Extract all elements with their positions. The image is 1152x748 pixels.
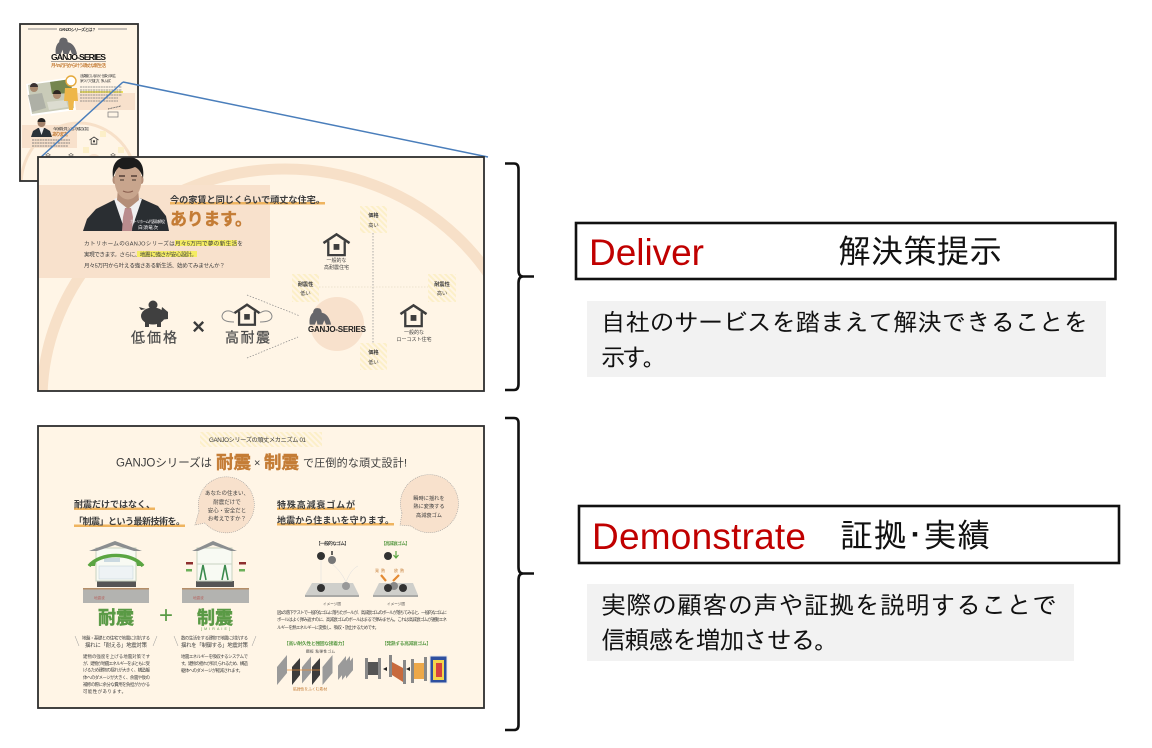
thumbnail header bbox=[28, 26, 127, 33]
thumbnail logo: 月々5万円から叶う頑丈な新生活 bbox=[51, 62, 106, 69]
illustration: earthquake-resistant house: 地震波 bbox=[94, 595, 105, 600]
thumbnail logo bbox=[51, 38, 106, 69]
heading: high-damping rubber bbox=[277, 499, 394, 526]
icon: general high-seismic house: 一般的な bbox=[326, 257, 347, 264]
heading: high-damping rubber: 特殊高減衰ゴムが bbox=[277, 499, 355, 510]
main title: × bbox=[254, 458, 260, 470]
axis label: seismic low: 低い bbox=[300, 289, 311, 297]
speech bubble: question: 耐震だけで bbox=[213, 498, 241, 506]
illustration: vibration-controlled house bbox=[182, 541, 249, 603]
thumbnail illustration: woman bbox=[64, 76, 78, 110]
diagram: durability plates: 粘弾性をふくむ素材 bbox=[293, 686, 327, 692]
thumbnail lower copy: あります。 bbox=[52, 131, 71, 138]
heading: vibration control: 「制震」という最新技術を。 bbox=[74, 516, 185, 526]
speech bubble: question: あなたの住まい、 bbox=[205, 489, 249, 497]
body copy: 実現できます。さらに、地震に強さが安心設計。 bbox=[84, 250, 197, 258]
illustration: earthquake-resistant house bbox=[83, 541, 149, 603]
heading box: Deliver: Deliver bbox=[589, 232, 704, 273]
axis label: price low: 価格 bbox=[368, 348, 379, 356]
icon: general low-cost house bbox=[396, 305, 432, 343]
panel: GANJO series mechanism bbox=[38, 426, 484, 708]
icon: general low-cost house: ローコスト住宅 bbox=[396, 336, 432, 343]
diagram: durability plates bbox=[277, 640, 353, 692]
axis label: price high: 高い bbox=[368, 221, 379, 229]
logo: GANJO-SERIES circle: GANJO-SERIES bbox=[308, 325, 367, 334]
heading box: Deliver bbox=[576, 223, 1116, 279]
plus sign: + bbox=[159, 602, 173, 629]
icon: general low-cost house: 一般的な bbox=[404, 329, 424, 336]
illustration: vibration-controlled house: 地震波 bbox=[193, 595, 204, 600]
heading box: Deliver: 解決策提示 bbox=[838, 233, 1002, 270]
axis label: price low bbox=[360, 343, 387, 370]
text block: Deliver description: 自社のサービスを踏まえて解決できることを bbox=[601, 310, 1088, 337]
heading: 今の家賃と同じくらいで頑丈な住宅。 bbox=[170, 194, 325, 205]
axis label: price high bbox=[360, 206, 387, 233]
body copy bbox=[84, 240, 243, 270]
text block: Demonstrate description: 信頼感を増加させる。 bbox=[601, 627, 839, 655]
diagram: ordinary rubber: イメージ図 bbox=[323, 602, 341, 606]
diagram: high-damping rubber: イメージ図 bbox=[387, 602, 405, 606]
axis label: price high: 価格 bbox=[368, 211, 379, 219]
body copy: カトリホームのGANJOシリーズは月々5万円で夢の新生活を bbox=[84, 240, 243, 248]
main title: 耐震 bbox=[216, 452, 252, 472]
text block: resistance: 揺れに「耐える」地震対策 bbox=[85, 641, 148, 649]
speech bubble: rubber bbox=[400, 475, 458, 533]
diagram: ordinary rubber: 【一般的なゴム】 bbox=[316, 540, 349, 547]
dotted connectors to logo bbox=[247, 295, 300, 358]
label: low price: 低価格 bbox=[131, 330, 177, 346]
text block: Deliver description bbox=[587, 301, 1106, 377]
text block: resistance: 体へのダメージが大きく、余震や後の bbox=[83, 674, 150, 681]
diagram: ordinary rubber bbox=[305, 540, 359, 606]
text block: Demonstrate description: 実際の顧客の声や証拠を説明することで bbox=[601, 592, 1057, 620]
speech bubble: question bbox=[195, 477, 254, 533]
heading: あります。 bbox=[170, 210, 252, 229]
main title: GANJOシリーズは bbox=[116, 456, 212, 470]
text block: resistance: 建物の強度を上げる地震対策です bbox=[83, 653, 151, 660]
axis label: price low: 低い bbox=[368, 358, 379, 366]
axis label: seismic high bbox=[428, 274, 456, 302]
main title: 制震 bbox=[264, 452, 300, 472]
label: 制震: 制震 bbox=[197, 608, 233, 628]
speech bubble: question: お考えですか？ bbox=[208, 516, 246, 522]
bracket: demonstrate bbox=[505, 418, 534, 730]
multiply sign: × bbox=[192, 314, 205, 339]
decorative arc and band bbox=[39, 164, 483, 390]
diagram: high-damping rubber bbox=[373, 540, 418, 606]
thumbnail text lines: 家づくりで悩む方、多いはず。 bbox=[80, 78, 113, 83]
section tag: GANJOシリーズの頑丈メカニズム 01 bbox=[209, 436, 307, 444]
text block: resistance: が、建物が地震エネルギーをまともに受 bbox=[83, 660, 151, 667]
text block: control: 数の生活をする建物で地震に対抗する bbox=[181, 634, 248, 642]
thumbnail logo: GANJO-SERIES bbox=[51, 52, 106, 62]
thumbnail text lines bbox=[80, 73, 123, 117]
thumbnail family photo bbox=[26, 77, 76, 116]
text block: Demonstrate description bbox=[587, 584, 1074, 661]
portrait of company president bbox=[83, 157, 169, 231]
text block: resistance: けるため建物の揺れが大きく、構造躯 bbox=[83, 666, 151, 674]
heading box: Demonstrate: 証拠･実績 bbox=[840, 517, 990, 554]
text block: control bbox=[174, 634, 256, 674]
explanatory paragraph: 図1の落下テストで一般的なゴムに落ちたボールが、高減衰ゴムのボールが落ちてみると、一般的なゴムに bbox=[277, 609, 447, 616]
icon: general high-seismic house: 高耐震住宅 bbox=[324, 264, 349, 271]
diagram: heat-generating rubber: 【発熱する高減衰ゴム】 bbox=[382, 640, 431, 647]
axes bbox=[319, 233, 428, 343]
text block: resistance: 地盤・基礎との住宅で地震に対抗する bbox=[82, 634, 150, 642]
label: 耐震: 耐震 bbox=[98, 608, 134, 628]
thumbnail lower copy bbox=[32, 126, 91, 146]
heading: vibration control bbox=[74, 498, 185, 527]
portrait of company president: 白須竜次 bbox=[138, 224, 158, 231]
portrait of company president: カトリホーム代表取締役 bbox=[130, 219, 165, 224]
heading bbox=[170, 194, 325, 229]
text block: control: 揺れを「制御する」地震対策 bbox=[181, 641, 249, 649]
text block: resistance bbox=[75, 634, 157, 695]
heading: high-damping rubber: 地震から住まいを守ります。 bbox=[277, 514, 394, 526]
thumbnail: brochure page bbox=[19, 23, 139, 182]
icon: piggy bank bbox=[139, 300, 168, 327]
text block: resistance: 補修の際に余分な費用を負担がかかる bbox=[83, 681, 150, 688]
main title bbox=[116, 452, 407, 472]
section tag bbox=[200, 432, 322, 447]
thumbnail icons bbox=[45, 131, 124, 168]
text block: control: 躯体へのダメージが軽減されます。 bbox=[181, 667, 243, 674]
main title: で圧倒的な頑丈設計! bbox=[303, 456, 407, 470]
panel: low price and high seismic resistance bbox=[37, 156, 485, 392]
logo: GANJO-SERIES circle bbox=[308, 297, 367, 351]
explanatory paragraph: ボールはよく弾み返すのに、高減衰ゴムのボールはまるで弾みません。これは高減衰ゴムが運動エネ bbox=[277, 616, 448, 623]
explanatory paragraph: ルギーを熱エネルギーに変換し、吸収・放出するためです。 bbox=[277, 624, 379, 631]
heading box: Demonstrate bbox=[579, 506, 1119, 563]
label: 制震: [MIRAIE] bbox=[201, 627, 230, 631]
body copy: 月々5万円から叶える強さある新生活、始めてみませんか？ bbox=[84, 262, 225, 270]
thumbnail text lines: 近頃増えているのが、仕事との両立。 bbox=[80, 73, 118, 78]
speech bubble: rubber: 瞬時に揺れを bbox=[413, 494, 445, 502]
speech bubble: question: 安心・安全だと bbox=[208, 506, 246, 514]
speech bubble: rubber: 熱に変換する bbox=[413, 502, 445, 510]
label: high seismic resistance: 高耐震 bbox=[225, 330, 270, 346]
diagram: heat-generating rubber bbox=[365, 640, 447, 684]
axis label: seismic high: 高い bbox=[437, 289, 447, 297]
zoom connector lines bbox=[40, 82, 488, 158]
diagram: durability plates: 【高い耐久性と強固な接着力】 bbox=[284, 640, 347, 647]
thumbnail band and arc bbox=[21, 93, 135, 180]
diagram: high-damping rubber: 【高減衰ゴム】 bbox=[381, 540, 410, 547]
thumbnail portrait bbox=[31, 118, 52, 137]
bracket: deliver bbox=[505, 164, 534, 390]
icon: strong house bbox=[222, 305, 272, 325]
heading: vibration control: 耐震だけではなく、 bbox=[74, 498, 155, 510]
axis label: seismic low bbox=[292, 274, 319, 302]
text block: Deliver description: 示す。 bbox=[601, 345, 667, 372]
speech bubble: rubber: 高減衰ゴム bbox=[416, 511, 442, 519]
diagram: durability plates: 鋼板 粘弾性ゴム bbox=[306, 648, 335, 654]
text block: control: す。建物の揺れが抑えられるため、構造 bbox=[181, 660, 249, 667]
axis label: seismic high: 耐震性 bbox=[434, 280, 450, 288]
heading box: Demonstrate: Demonstrate bbox=[592, 516, 806, 557]
thumbnail lower copy: 今の家賃と同じくらいで頑丈な住宅。 bbox=[53, 126, 91, 131]
diagram: high-damping rubber: 発熱 bbox=[375, 567, 385, 573]
thumbnail header: GANJOシリーズとは？ bbox=[59, 26, 96, 33]
text block: resistance: 可能性があります。 bbox=[83, 688, 126, 695]
explanatory paragraph bbox=[277, 609, 448, 631]
axis label: seismic low: 耐震性 bbox=[298, 280, 313, 288]
text block: control: 地震エネルギーを吸収するシステムで bbox=[181, 653, 249, 660]
icon: general high-seismic house bbox=[323, 234, 350, 271]
diagram: high-damping rubber: 放熱 bbox=[394, 567, 404, 573]
